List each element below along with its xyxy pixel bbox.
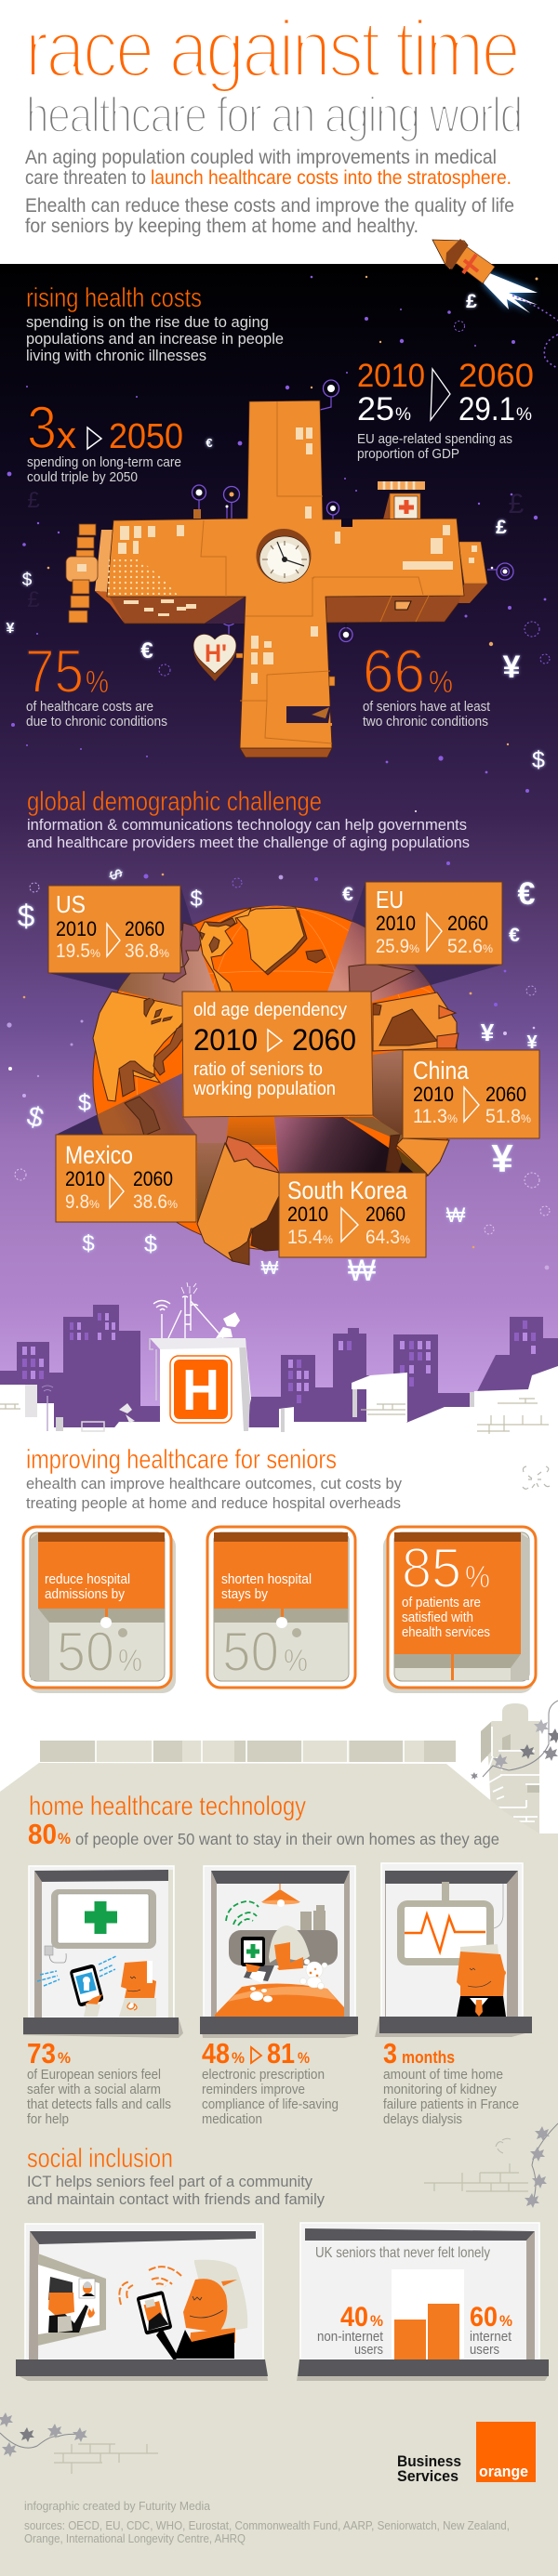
city skyline xyxy=(0,1282,558,1465)
panel: US xyxy=(48,886,180,973)
panel: Mexico: 38.6 xyxy=(133,1191,167,1213)
left wing cap and satellite boxes xyxy=(95,530,113,592)
heading: improving healthcare for seniors: improving healthcare for seniors xyxy=(26,1445,337,1475)
panel: Mexico: 2060 xyxy=(133,1167,173,1190)
panel: China: 2060 xyxy=(485,1083,526,1106)
intro text block: care threaten to xyxy=(25,167,146,189)
panel: EU: % xyxy=(483,942,493,955)
panel: EU: 2060 xyxy=(447,912,488,935)
main cross-shaped roof xyxy=(107,401,464,748)
stat: EU spending 2010 to 2060: 2010 xyxy=(357,358,425,394)
house wall background xyxy=(0,1763,558,2576)
hospital tower with H sign xyxy=(150,1282,251,1431)
ivy and bricks near social inclusion xyxy=(424,2123,558,2208)
stat: EU spending 2010 to 2060 xyxy=(357,358,534,462)
intro text block: Ehealth can reduce these costs and improve the quality of life xyxy=(25,195,514,217)
skyscraper windows xyxy=(22,1313,536,1403)
panel: US: 2010 xyxy=(56,917,97,940)
window: UK seniors lonely bar chart: UK seniors that never felt lonely xyxy=(315,2245,490,2261)
panel: old age dependency: 2060 xyxy=(292,1023,356,1057)
intro text block xyxy=(25,147,514,237)
currency symbols floating in space: £ xyxy=(466,291,477,312)
text: improving healthcare intro xyxy=(26,1475,402,1512)
stat: 75 percent xyxy=(25,637,167,729)
icon: heart H sign: H' xyxy=(205,639,227,667)
panel: US: % xyxy=(90,947,100,960)
card: reduce hospital admissions: reduce hospital xyxy=(45,1572,130,1587)
intro text block: An aging population coupled with improvements in medical xyxy=(25,147,497,168)
stat: 3x by 2050: spending on long-term care xyxy=(27,455,181,470)
Greenland and arctic land xyxy=(236,908,326,975)
currency symbols floating in space: ₩ xyxy=(348,1254,376,1287)
logo: orange xyxy=(476,2422,536,2482)
stat: 75 percent: of healthcare costs are xyxy=(26,700,153,715)
panel: EU: 2010 xyxy=(376,912,416,935)
stat: 3 months: delays dialysis xyxy=(383,2111,462,2127)
panel: EU: 52.6 xyxy=(447,936,483,957)
spotlight beams on globe xyxy=(97,922,430,1223)
currency symbols floating in space: £ xyxy=(496,517,507,538)
currency symbols floating in space: $ xyxy=(105,867,126,882)
green wifi waves xyxy=(226,1901,259,1925)
card: reduce hospital admissions: 50 xyxy=(57,1621,114,1683)
teddy bear xyxy=(299,1959,327,1989)
logo: Business Services wordmark: Services xyxy=(397,2467,458,2485)
logo: orange: orange xyxy=(479,2463,528,2480)
panel: South Korea xyxy=(279,1173,426,1257)
stat: 75 percent: % xyxy=(86,664,109,699)
white foreground rooftops xyxy=(0,1366,558,1465)
stat: 48 to 81 percent: medication xyxy=(202,2111,262,2127)
communication masts on hospital roof xyxy=(153,1282,223,1338)
roof notch at bottom of lower wing xyxy=(286,706,331,723)
label: 60 percent: internet xyxy=(470,2329,512,2345)
text: improving healthcare intro: ehealth can improve healthcare outcomes, cut costs by xyxy=(26,1475,402,1492)
panel: South Korea: 15.4 xyxy=(287,1227,323,1248)
stat: 73 percent social alarm: 73 xyxy=(27,2037,56,2070)
wall tablet screen with green cross xyxy=(51,1889,156,1949)
panel: old age dependency: ratio of seniors to xyxy=(193,1059,323,1080)
icon: rocket xyxy=(432,239,538,313)
land under beams xyxy=(163,908,414,992)
heading: home healthcare technology: home healthcare technology xyxy=(29,1792,306,1821)
card: 85 percent satisfied xyxy=(383,1527,536,1693)
panel: US: 19.5 xyxy=(56,940,90,962)
window: medication reminder xyxy=(204,1866,355,2017)
window: kidney monitoring xyxy=(381,1863,523,2017)
label: 60 percent: 60 xyxy=(470,2302,498,2333)
window: video call xyxy=(25,2224,263,2360)
panel: China: 51.8 xyxy=(485,1106,521,1127)
bed with pills xyxy=(215,1983,344,2017)
logo: Business Services wordmark: Business xyxy=(397,2452,461,2470)
panel: Mexico: Mexico xyxy=(65,1141,133,1169)
stat: 75 percent: 75 xyxy=(25,637,84,705)
satellite dish on hospital roof xyxy=(216,1312,240,1338)
panel: China: % xyxy=(447,1112,458,1125)
window sill social left xyxy=(16,2359,268,2381)
stat: 80 percent stay at home: 80 xyxy=(28,1818,57,1850)
sources: sources: OECD, EU, CDC, WHO, Eurostat, Commonwealth Fund, AARP, Seniorwatch, New Zealand, xyxy=(24,2519,510,2532)
card: shorten hospital stays: % xyxy=(284,1643,308,1677)
stat: EU spending 2010 to 2060: EU age-related spending as xyxy=(357,431,512,447)
ceiling monitor with ECG trace xyxy=(397,1882,503,1965)
South America xyxy=(197,1137,279,1265)
stat: 73 percent social alarm: that detects falls and calls xyxy=(27,2096,171,2112)
panel: Mexico: 9.8 xyxy=(65,1191,89,1213)
card: reduce hospital admissions: % xyxy=(118,1643,142,1677)
card: shorten hospital stays: stays by xyxy=(221,1587,269,1602)
stat: 73 percent social alarm: of European seniors feel xyxy=(27,2067,161,2083)
panel: old age dependency: old age dependency xyxy=(193,1000,347,1020)
text: global demographic intro xyxy=(27,816,470,851)
panel: China xyxy=(403,1050,539,1138)
sources: Orange, International Longevity Centre, AHRQ xyxy=(24,2532,246,2545)
currency symbols floating in space: $ xyxy=(24,1100,47,1135)
panel: old age dependency: working population xyxy=(193,1079,336,1099)
globe grid lines xyxy=(118,906,434,1250)
label: 40 percent: % xyxy=(370,2312,383,2330)
stat: EU spending 2010 to 2060: 29.1 xyxy=(458,391,515,427)
window: UK seniors lonely bar chart xyxy=(300,2223,539,2359)
panel: China: % xyxy=(521,1112,531,1125)
H sign: H xyxy=(182,1359,219,1423)
panel: old age dependency xyxy=(182,992,373,1117)
currency symbols floating in space: ₩ xyxy=(446,1203,466,1227)
text: global demographic intro: and healthcare providers meet the challenge of aging populations xyxy=(27,834,470,851)
panel: Mexico xyxy=(56,1135,196,1222)
stat: 66 percent: two chronic conditions xyxy=(363,715,488,729)
panel: US: 36.8 xyxy=(125,940,159,962)
roof sign with red cross xyxy=(378,481,425,519)
heading: global demographic challenge: global demographic challenge xyxy=(27,787,322,817)
roof seam lines xyxy=(201,401,429,743)
text: global demographic intro: information & communications technology can help governments xyxy=(27,816,467,834)
right wing cap xyxy=(458,542,487,584)
stat: 48 to 81 percent: reminders improve xyxy=(202,2082,305,2097)
intro text block: launch healthcare costs into the stratosphere. xyxy=(151,167,512,189)
stat: 80 percent stay at home xyxy=(28,1818,499,1850)
stat: EU spending 2010 to 2060: proportion of GDP xyxy=(357,446,459,462)
panel: old age dependency: 2010 xyxy=(193,1023,258,1057)
hand-held tablet with blue signal xyxy=(37,1956,116,2017)
window sill 1 xyxy=(23,2017,183,2038)
icon: heart H sign xyxy=(193,634,243,681)
roof tiles xyxy=(40,1741,456,1762)
card: 85 percent satisfied: satisfied with xyxy=(402,1610,473,1625)
stat: 48 to 81 percent xyxy=(202,2037,339,2127)
rooftop antenna and dish, left xyxy=(42,1386,135,1431)
currency symbols floating in space: € xyxy=(509,925,520,946)
stat: 66 percent xyxy=(363,637,490,729)
text: rising health costs intro: living with chronic illnesses xyxy=(26,348,206,364)
currency symbols floating in space: ¥ xyxy=(481,1019,495,1046)
stat: EU spending 2010 to 2060: % xyxy=(395,405,411,425)
credit line: infographic created by Futurity Media xyxy=(24,2499,211,2513)
text: rising health costs intro xyxy=(26,314,284,364)
currency symbols floating in space: ¥ xyxy=(503,650,521,685)
stat: 3 months xyxy=(383,2037,519,2127)
currency symbols floating in space: ¥ xyxy=(7,621,15,637)
logo: Business Services wordmark xyxy=(397,2452,461,2485)
halftone dots on roof xyxy=(107,559,178,595)
panel: South Korea: % xyxy=(400,1233,410,1246)
stat: 3 months: months xyxy=(402,2048,455,2067)
label: 40 percent: 40 xyxy=(340,2302,368,2333)
window: social alarm xyxy=(29,1866,174,2018)
card: shorten hospital stays xyxy=(207,1527,355,1688)
shelf bottles xyxy=(300,1905,326,1930)
panel: US: US xyxy=(56,890,86,918)
card: reduce hospital admissions: admissions by xyxy=(45,1587,126,1602)
stat: 3x by 2050: 2050 xyxy=(109,417,183,456)
bars xyxy=(392,2269,464,2359)
hospital building seen from above xyxy=(66,380,513,757)
globe ocean xyxy=(93,906,459,1250)
elderly woman with tablet xyxy=(156,2260,247,2360)
panel: South Korea: 2060 xyxy=(365,1203,405,1226)
stat: 48 to 81 percent: compliance of life-saving xyxy=(202,2096,339,2112)
panel: South Korea: 2010 xyxy=(287,1203,328,1226)
stat: 3x by 2050: 3 xyxy=(27,394,57,461)
stat: 3 months: monitoring of kidney xyxy=(383,2082,497,2097)
doctor xyxy=(457,1944,506,2017)
label: 40 percent: users xyxy=(354,2342,383,2358)
orange wifi waves xyxy=(119,2267,181,2305)
stat: 73 percent social alarm: % xyxy=(58,2049,71,2067)
panel: South Korea: % xyxy=(323,1233,333,1246)
globe illustration xyxy=(48,882,502,1265)
text: rising health costs intro: populations and an increase in people xyxy=(26,331,284,348)
panel: US: % xyxy=(159,947,169,960)
stat: 80 percent stay at home: % xyxy=(58,1830,71,1847)
card: 85 percent satisfied: % xyxy=(465,1559,490,1594)
stat: 3x by 2050 xyxy=(27,394,183,485)
prescription tablet xyxy=(241,1937,265,1972)
panel: EU: % xyxy=(409,942,419,955)
heading: social inclusion: social inclusion xyxy=(27,2144,173,2174)
card: shorten hospital stays: shorten hospital xyxy=(221,1572,312,1587)
headboard xyxy=(229,1930,338,1965)
Central America xyxy=(125,1097,160,1136)
woman in bed xyxy=(244,1925,310,1983)
skyline brick marks xyxy=(0,1399,549,1434)
roof notch near sign xyxy=(341,519,352,527)
panel: Mexico: 2010 xyxy=(65,1167,105,1190)
stat: 3 months: failure patients in France xyxy=(383,2096,519,2112)
currency symbols floating in space: $ xyxy=(22,571,33,590)
stat: 3x by 2050: x xyxy=(57,415,76,456)
ivy on chimney xyxy=(471,1701,558,1780)
stat: EU spending 2010 to 2060: % xyxy=(516,405,532,425)
text: social inclusion intro: and maintain contact with friends and family xyxy=(27,2190,325,2208)
stat: EU spending 2010 to 2060: 2060 xyxy=(458,358,534,394)
spotlight beams outside globe xyxy=(48,882,502,1135)
panel: EU: EU xyxy=(376,886,404,913)
panel: China: China xyxy=(413,1057,470,1084)
currency symbols floating in space: ₩ xyxy=(261,1258,279,1279)
currency symbols floating in space: £ xyxy=(509,489,525,519)
tablet in hand xyxy=(136,2291,173,2335)
currency symbols floating in space: $ xyxy=(78,1090,91,1116)
H sign xyxy=(170,1356,232,1423)
roof skylights xyxy=(77,427,477,684)
stat: 66 percent: 66 xyxy=(363,637,425,705)
card: shorten hospital stays: 50 xyxy=(222,1621,279,1683)
card: 85 percent satisfied: ehealth services xyxy=(402,1625,490,1640)
text: social inclusion intro xyxy=(27,2173,325,2208)
stat: 3 months: 3 xyxy=(383,2037,397,2070)
currency symbols floating in space: ¥ xyxy=(526,1032,538,1053)
window sill social right xyxy=(297,2359,549,2381)
panel: EU: 25.9 xyxy=(376,936,409,957)
label: 60 percent: % xyxy=(499,2312,512,2330)
stat: 48 to 81 percent: % xyxy=(298,2049,310,2067)
stat: EU spending 2010 to 2060: 25 xyxy=(357,391,394,427)
currency symbols floating in space xyxy=(7,291,545,1287)
chimney xyxy=(481,1703,539,1833)
dashed purple rocket trail xyxy=(512,296,558,368)
stat: 3 months: amount of time home xyxy=(383,2067,503,2083)
currency symbols floating in space: € xyxy=(518,876,536,912)
card: reduce hospital admissions xyxy=(23,1527,176,1693)
stat: 73 percent social alarm: for help xyxy=(27,2111,69,2127)
panel: Mexico: % xyxy=(89,1198,100,1211)
star field dots xyxy=(7,276,550,1269)
window sill 3 xyxy=(375,2017,532,2037)
lamp xyxy=(261,1884,300,1907)
night sky background panel xyxy=(0,264,558,1437)
label: 60 percent xyxy=(470,2302,512,2358)
card: 85 percent satisfied: 85 xyxy=(402,1537,461,1599)
stat: 66 percent: of seniors have at least xyxy=(363,700,490,715)
elderly woman xyxy=(119,1961,156,2017)
currency symbols floating in space: € xyxy=(342,884,353,905)
currency symbols floating in space: $ xyxy=(18,899,34,933)
label: 60 percent: users xyxy=(470,2342,499,2358)
stat: 66 percent: % xyxy=(429,664,453,699)
North America xyxy=(93,981,183,1101)
heading: rising health costs: rising health costs xyxy=(26,283,202,313)
currency symbols floating in space: £ xyxy=(27,587,40,612)
sources xyxy=(24,2519,510,2545)
label: 40 percent xyxy=(317,2302,384,2358)
ivy and bricks lower left xyxy=(0,2412,158,2474)
currency symbols floating in space: € xyxy=(206,436,213,450)
panel: US: 2060 xyxy=(125,917,165,940)
currency symbols floating in space: $ xyxy=(532,747,545,773)
stat: 48 to 81 percent: 48 xyxy=(202,2037,230,2070)
stat: 73 percent social alarm xyxy=(27,2037,171,2127)
stat: 73 percent social alarm: safer with a social alarm xyxy=(27,2082,161,2097)
stat: 75 percent: due to chronic conditions xyxy=(26,715,167,729)
stat: 48 to 81 percent: electronic prescription xyxy=(202,2067,325,2083)
currency symbols floating in space: £ xyxy=(27,488,40,513)
icon: clock xyxy=(257,529,311,583)
wall screen with man on call xyxy=(38,2254,106,2346)
stat: 3x by 2050: could triple by 2050 xyxy=(27,470,138,485)
currency symbols floating in space: $ xyxy=(82,1231,95,1256)
text: rising health costs intro: spending is on the rise due to aging xyxy=(26,314,269,331)
stat: 80 percent stay at home: of people over 50 want to stay in their own homes as they age xyxy=(75,1830,499,1848)
decorative flower mark xyxy=(523,1466,550,1489)
currency symbols floating in space: $ xyxy=(144,1231,157,1257)
text: improving healthcare intro: treating people at home and reduce hospital overheads xyxy=(26,1494,401,1512)
panel: EU xyxy=(365,882,502,965)
currency symbols floating in space: ¥ xyxy=(491,1137,513,1180)
card: 85 percent satisfied: of patients are xyxy=(402,1596,481,1610)
currency symbols floating in space: € xyxy=(140,638,153,664)
Africa and Asia land xyxy=(373,992,458,1176)
wall socket xyxy=(49,1953,66,1963)
panel: South Korea: South Korea xyxy=(287,1176,408,1204)
building undersides xyxy=(107,597,246,624)
panel: South Korea: 64.3 xyxy=(365,1227,400,1248)
panel: China: 11.3 xyxy=(413,1106,447,1127)
text: social inclusion intro: ICT helps seniors feel part of a community xyxy=(27,2173,312,2190)
panel: China: 2010 xyxy=(413,1083,454,1106)
intro text block: for seniors by keeping them at home and healthy. xyxy=(25,216,418,237)
label: 40 percent: non-internet xyxy=(317,2329,384,2345)
stat: 48 to 81 percent: % xyxy=(232,2049,245,2067)
panel: Mexico: % xyxy=(167,1198,178,1211)
antenna pins around hospital xyxy=(192,380,513,641)
stat: 48 to 81 percent: 81 xyxy=(267,2037,295,2070)
currency symbols floating in space: $ xyxy=(190,887,203,912)
window sill 2 xyxy=(200,2017,358,2038)
